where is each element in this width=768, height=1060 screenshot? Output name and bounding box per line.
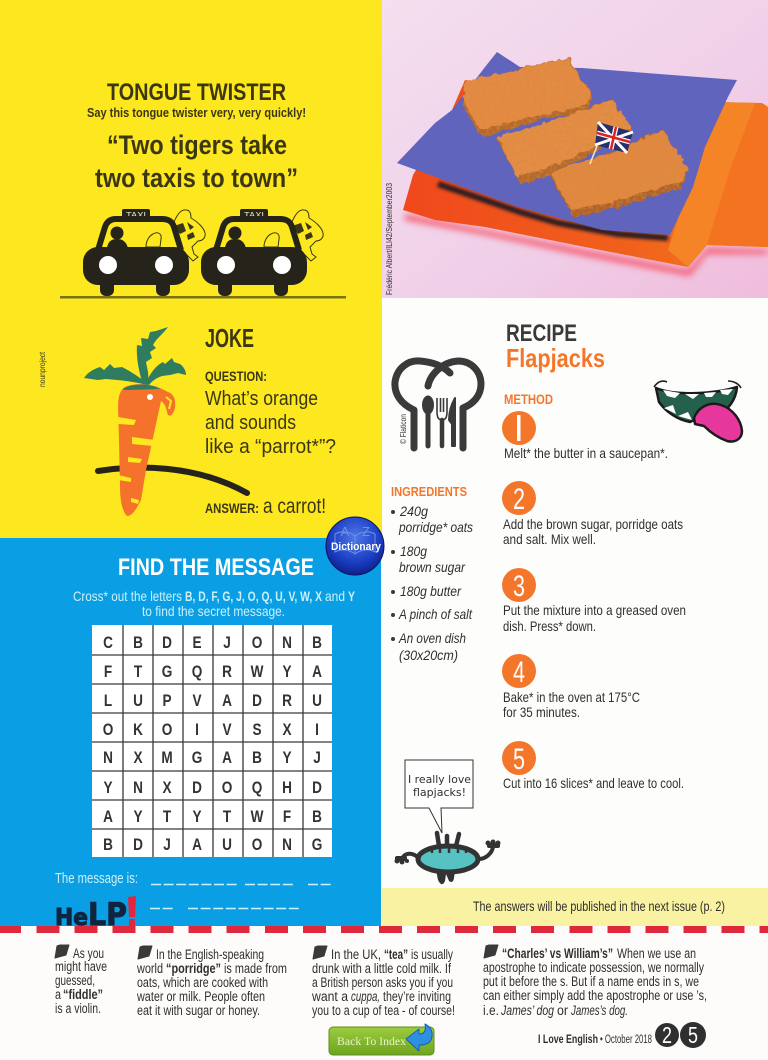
- speech bubble: I really love: [408, 774, 471, 786]
- panel: tongue twister and joke background: [0, 0, 382, 538]
- badge: dictionary: Dictionary: [331, 541, 382, 553]
- icon: book: [138, 946, 152, 959]
- step 1: Melt* the butter in a saucepan*.: [504, 445, 668, 461]
- badge: dictionary: Z: [362, 524, 370, 539]
- note: fiddle: [55, 945, 107, 1016]
- orange napkin: [403, 80, 768, 276]
- heading: joke: JOKE: [205, 323, 254, 353]
- heading: find the message: FIND THE MESSAGE: [118, 554, 314, 581]
- badge: dictionary: A: [341, 524, 350, 539]
- text: joke question: like a “parrot*”?: [205, 436, 336, 458]
- step 4: 4: [513, 654, 525, 689]
- ingredients list: A pinch of salt: [398, 606, 473, 622]
- step 3: [502, 568, 686, 634]
- icon: book: [55, 945, 69, 958]
- speech bubble: flapjacks!: [413, 787, 466, 799]
- step 4: for 35 minutes.: [503, 704, 580, 720]
- credit: nounproject: nounproject: [38, 351, 47, 387]
- note: apostrophes: or: [557, 1003, 568, 1018]
- step 2: 2: [513, 481, 525, 516]
- button: back to index: [329, 1024, 434, 1055]
- note: tea: [311, 946, 455, 1018]
- text: tongue twister phrase: [95, 130, 298, 193]
- step 1: [502, 411, 668, 461]
- word search grid: CBDEJONB: [103, 634, 322, 652]
- text: tongue twister phrase: “Two tigers take: [107, 130, 287, 160]
- icon: blue back arrow: [406, 1024, 432, 1051]
- speech bubble: [405, 760, 473, 833]
- note: apostrophes: can either simply add the apostrophe or use ’s,: [483, 988, 707, 1003]
- icon: taxi two: TAXI: [244, 211, 264, 220]
- note: porridge: “porridge”: [166, 961, 221, 976]
- ingredients list: An oven dish: [398, 630, 466, 646]
- word search grid: BDJAUONG: [103, 836, 322, 854]
- mini union jack flag: [590, 122, 633, 164]
- heading: method: METHOD: [504, 391, 553, 407]
- note: apostrophes: [483, 945, 707, 1018]
- text: joke answer: a carrot!: [263, 495, 326, 518]
- step 2: [502, 481, 683, 547]
- text: joke question: What’s orange: [205, 388, 318, 410]
- note: porridge: In the English-speaking: [156, 947, 264, 962]
- text: tongue twister instruction: Say this tongue twister very, very quickly!: [87, 105, 306, 120]
- note: apostrophes: James’ dog: [500, 1003, 554, 1018]
- text: joke question: QUESTION:: [205, 368, 267, 384]
- ingredients list: 180g: [400, 543, 427, 559]
- text: find the message instructions: [73, 588, 355, 619]
- ingredients list: 240g: [399, 503, 428, 519]
- text: the message is: The message is:: [55, 870, 138, 887]
- step 5: Cut into 16 slices* and leave to cool.: [503, 775, 684, 791]
- word search grid: FTGQRWYA: [104, 663, 322, 681]
- carrot leaves: [84, 327, 186, 385]
- icon: chef hat with cutlery: [395, 361, 481, 448]
- footer: magazine credit: • October 2018: [600, 1034, 652, 1046]
- badge: dictionary: [326, 517, 384, 575]
- word search grid: OKOIVSXI: [103, 721, 319, 739]
- icon: taxi one: TAXI: [126, 211, 146, 220]
- heading: flapjacks: Flapjacks: [506, 343, 605, 373]
- note: tea: you to a cup of tea - of course!: [312, 1003, 455, 1018]
- illustration: carrot on a line: [84, 327, 247, 516]
- note: tea: want a: [311, 989, 348, 1004]
- text: find the message instructions: Cross* out the letters: [73, 588, 182, 604]
- button: back to index: Back To Index: [337, 1034, 406, 1048]
- note: apostrophes: When we use an: [617, 946, 696, 961]
- text: tongue twister phrase: two taxis to town”: [95, 163, 298, 193]
- note: tea: drunk with a little cold milk. If: [312, 961, 451, 976]
- blue napkin: [397, 52, 737, 235]
- credit: photo: Frédéric Albert/ILI42/September2003: [384, 183, 394, 295]
- step 4: [502, 654, 640, 720]
- step 2: and salt. Mix well.: [503, 531, 596, 547]
- step 4: Bake* in the oven at 175°C: [503, 689, 640, 705]
- note: porridge: water or milk. People often: [136, 989, 265, 1004]
- heading: ingredients: INGREDIENTS: [391, 484, 467, 499]
- note: apostrophes: i.e.: [483, 1003, 499, 1018]
- note: tea: is usually: [411, 947, 453, 962]
- text: find the message instructions: to find the secret message.: [142, 603, 285, 619]
- note: porridge: oats, which are cooked with: [137, 975, 268, 990]
- text: joke answer: ANSWER:: [205, 500, 259, 516]
- illustration: two taxis with tigers: [60, 209, 346, 298]
- note: fiddle: As you: [73, 946, 104, 961]
- ingredients list: 180g butter: [400, 583, 462, 599]
- icon: taxi two: [201, 209, 323, 296]
- word search grid: AYTYTWFB: [103, 808, 322, 826]
- page number: 2: [662, 1023, 672, 1049]
- note: apostrophes: put it before the s. But if a name ends in s, we: [483, 974, 699, 989]
- note: tea: a British person asks you if you: [312, 975, 453, 990]
- note: apostrophes: apostrophe to indicate possession, we normally: [483, 960, 704, 975]
- step 5: 5: [513, 741, 525, 776]
- logo: help!: [55, 896, 136, 933]
- credit: flaticon: © Flaticon: [399, 414, 408, 444]
- logo: help!: He: [55, 905, 88, 931]
- character: blue monster: [394, 833, 500, 884]
- heading: tongue twister: TONGUE TWISTER: [107, 79, 286, 106]
- panel: recipe background: [382, 298, 768, 888]
- note: porridge: world: [136, 961, 163, 976]
- note: fiddle: “fiddle”: [63, 987, 103, 1002]
- icon: taxi one: [83, 209, 205, 296]
- icon: book: [313, 946, 327, 959]
- flapjack bars: [465, 60, 687, 215]
- text: find the message instructions: B, D, F, G, J, O, Q, U, V, W, X: [185, 588, 322, 604]
- step 3: dish. Press* down.: [503, 618, 596, 634]
- text: joke question: [205, 368, 336, 458]
- icon: mouth with tongue: [654, 381, 742, 442]
- note: tea: “tea”: [384, 947, 408, 962]
- ingredients list: [391, 503, 473, 663]
- text: find the message instructions: Y: [348, 588, 355, 604]
- word search grid: [92, 625, 332, 857]
- footer: magazine credit: I Love English: [538, 1032, 598, 1046]
- note: fiddle: a: [55, 987, 61, 1002]
- note: tea: In the UK,: [331, 947, 381, 962]
- note: tea: they’re inviting: [383, 989, 451, 1004]
- note: porridge: [136, 946, 287, 1018]
- text: joke answer: [205, 495, 326, 518]
- step 3: 3: [513, 568, 525, 603]
- icon: book: [484, 945, 498, 958]
- text: find the message instructions: and: [325, 588, 345, 604]
- note: fiddle: might have: [55, 959, 107, 974]
- note: fiddle: is a violin.: [55, 1001, 101, 1016]
- page number: 5: [688, 1023, 698, 1049]
- note: porridge: eat it with sugar or honey.: [137, 1003, 260, 1018]
- ingredients list: brown sugar: [399, 559, 466, 575]
- flapjack photo: [382, 0, 768, 298]
- logo: help!: LP: [88, 897, 127, 933]
- text: joke question: and sounds: [205, 412, 296, 434]
- answer blanks: [150, 884, 333, 908]
- ingredients list: porridge* oats: [398, 519, 473, 535]
- divider: dashed red line: [0, 926, 768, 933]
- banner: answers note: [382, 888, 768, 926]
- ingredients list: (30x20cm): [399, 647, 458, 663]
- word search grid: NXMGABYJ: [103, 749, 321, 767]
- step 2: Add the brown sugar, porridge oats: [503, 516, 683, 532]
- note: apostrophes: James’s dog.: [570, 1003, 628, 1018]
- napkin shadow: [438, 184, 668, 238]
- note: porridge: is made from: [224, 961, 287, 976]
- page number: [655, 1022, 706, 1049]
- step 5: [502, 741, 684, 791]
- panel: find the message background: [0, 538, 381, 926]
- heading: recipe: RECIPE: [506, 320, 577, 347]
- note: tea: cuppa,: [351, 989, 380, 1004]
- step 3: Put the mixture into a greased oven: [503, 602, 686, 618]
- word search grid: LUPVADRU: [104, 692, 322, 710]
- word search grid: YNXDOQHD: [103, 779, 322, 797]
- note: apostrophes: “Charles’ vs William’s”: [502, 946, 613, 961]
- note: fiddle: guessed,: [55, 973, 95, 988]
